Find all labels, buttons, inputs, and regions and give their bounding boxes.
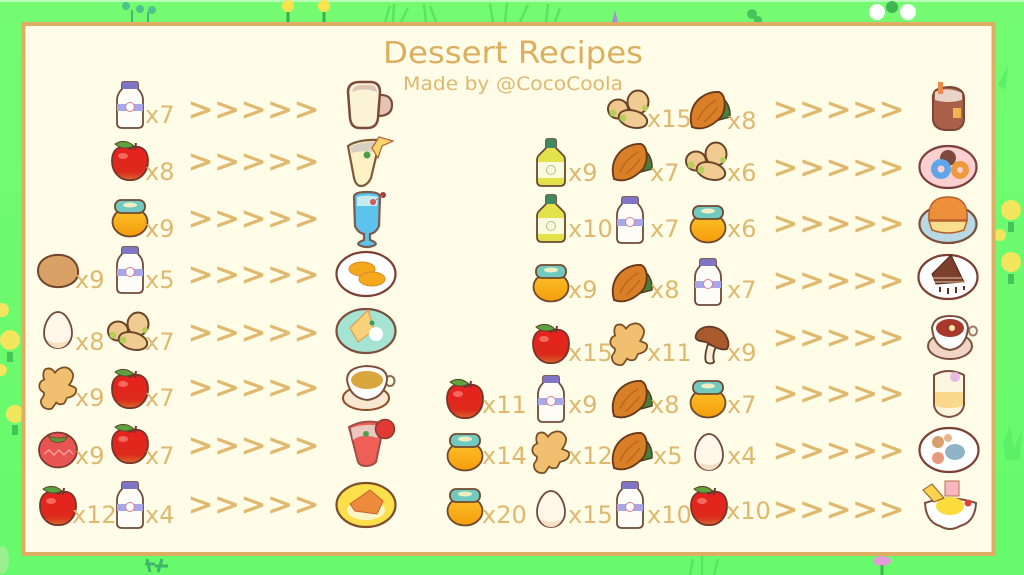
icon: tomato (39, 432, 77, 468)
result: cookie plate (920, 428, 978, 472)
result: pancakes (336, 252, 396, 296)
icon: ginger (613, 327, 644, 362)
icon: milk (617, 482, 643, 528)
icon: ginger (535, 435, 566, 470)
result: layered parfait glass (934, 371, 964, 417)
quantity: x8 (75, 328, 104, 356)
arrows: >>>>> (188, 202, 319, 236)
title: Dessert Recipes (383, 36, 643, 71)
result: apple smoothie (348, 137, 393, 186)
icon: ginger (42, 371, 73, 406)
quantity: x7 (145, 384, 174, 412)
result: pudding sundae (923, 481, 976, 529)
arrows: >>>>> (773, 376, 904, 412)
recipe row 12: honey, cocoa, milk (534, 255, 978, 305)
icon: apple (40, 486, 76, 525)
quantity: x15 (568, 501, 613, 529)
icon: honey jar (534, 265, 568, 302)
result: ginger tea cup (343, 366, 394, 410)
recipe row 15: honey, ginger, cocoa, egg (448, 428, 978, 472)
quantity: x8 (650, 391, 679, 419)
quantity: x10 (568, 215, 613, 243)
recipe row 3: honey (112, 192, 386, 247)
recipe row 8: apple and milk (40, 482, 396, 529)
result: herbal tea (928, 316, 977, 359)
icon: peanut (608, 90, 649, 131)
quantity: x9 (727, 339, 756, 367)
result: hot milk mug (348, 82, 392, 128)
icon: honey jar (448, 489, 482, 526)
recipe row 14: apple, milk, cocoa, honey (447, 371, 964, 422)
recipe row 5: egg and peanut (44, 309, 396, 356)
icon: apple (112, 141, 148, 180)
result: apple pie on yellow plate (336, 483, 396, 527)
icon: honey jar (448, 434, 482, 470)
quantity: x6 (727, 215, 756, 243)
icon: honey jar (690, 381, 726, 418)
arrows: >>>>> (773, 492, 904, 528)
result: chocolate cake slice (918, 255, 978, 299)
result: blue soda (354, 192, 386, 247)
icon: cocoa (613, 144, 652, 180)
icon: cocoa (613, 433, 652, 469)
icon: peanut (686, 142, 727, 183)
result: burger-shaped cake (920, 197, 976, 243)
quantity: x7 (145, 101, 174, 129)
icon: mushroom (696, 327, 728, 364)
quantity: x14 (482, 442, 527, 470)
arrows: >>>>> (188, 144, 319, 180)
arrows: >>>>> (188, 258, 319, 292)
result: tomato juice (349, 420, 394, 466)
icon: peanut (108, 312, 149, 353)
icon: egg (44, 312, 72, 348)
quantity: x5 (145, 266, 174, 294)
quantity: x7 (727, 276, 756, 304)
result: donuts on pink plate (920, 146, 976, 188)
arrows: >>>>> (188, 92, 319, 128)
recipe row 6: ginger and apple (42, 366, 394, 412)
icon: cocoa (613, 265, 652, 301)
icon: oil bottle (537, 195, 565, 242)
result: chiffon cake on teal plate (336, 309, 396, 353)
arrows: >>>>> (773, 320, 904, 356)
quantity: x4 (145, 501, 174, 529)
icon: apple (112, 369, 148, 408)
arrows: >>>>> (773, 92, 904, 128)
icon: milk (695, 259, 721, 305)
recipe row 13: apple, ginger, mushroom (533, 316, 977, 367)
arrows: >>>>> (773, 434, 904, 468)
quantity: x7 (650, 215, 679, 243)
recipe row 4: potato and milk (38, 247, 396, 296)
icon: egg (537, 491, 565, 527)
arrows: >>>>> (773, 264, 904, 298)
quantity: x15 (568, 339, 613, 367)
quantity: x9 (75, 266, 104, 294)
arrows: >>>>> (188, 370, 319, 406)
quantity: x12 (72, 501, 117, 529)
recipe row 16: honey, egg, milk, apple (448, 481, 976, 529)
icon: milk (117, 247, 143, 293)
icon: cocoa (691, 92, 730, 128)
quantity: x8 (650, 276, 679, 304)
icon: apple (447, 379, 483, 418)
quantity: x11 (647, 339, 692, 367)
quantity: x20 (482, 501, 527, 529)
quantity: x5 (653, 442, 682, 470)
icon: milk (117, 82, 143, 128)
arrows: >>>>> (188, 428, 319, 464)
quantity: x9 (145, 215, 174, 243)
result: iced tea jar (933, 82, 964, 130)
arrows: >>>>> (188, 488, 319, 522)
quantity: x12 (568, 442, 613, 470)
quantity: x6 (727, 159, 756, 187)
icon: milk (117, 482, 143, 528)
quantity: x9 (568, 276, 597, 304)
icon: honey jar (112, 200, 148, 236)
arrows: >>>>> (773, 206, 904, 242)
recipe row 9: peanut and cocoa (608, 82, 964, 135)
icon: cocoa (613, 381, 652, 417)
quantity: x11 (482, 391, 527, 419)
icon: oil bottle (537, 139, 565, 186)
icon: egg (695, 434, 723, 470)
icon: apple (533, 324, 569, 363)
icon: apple (691, 486, 727, 525)
icon: potato (38, 255, 78, 287)
quantity: x4 (727, 442, 756, 470)
quantity: x7 (145, 442, 174, 470)
quantity: x7 (145, 328, 174, 356)
arrows: >>>>> (188, 316, 319, 350)
icon: milk (617, 197, 643, 243)
quantity: x7 (650, 159, 679, 187)
quantity: x9 (568, 159, 597, 187)
icon: honey jar (690, 206, 726, 242)
quantity: x8 (145, 158, 174, 186)
recipe row 1: milk (117, 82, 392, 129)
quantity: x9 (568, 391, 597, 419)
recipe row 7: tomato and apple (39, 420, 394, 470)
quantity: x9 (75, 384, 104, 412)
quantity: x15 (647, 105, 692, 133)
icon: apple (112, 424, 148, 463)
recipe row 2: apple (112, 137, 393, 186)
subtitle: Made by @CocoCoola (403, 73, 623, 95)
quantity: x7 (727, 391, 756, 419)
quantity: x8 (727, 107, 756, 135)
arrows: >>>>> (773, 150, 904, 186)
recipe row 11: oil, milk, honey (537, 195, 976, 243)
quantity: x10 (726, 497, 771, 525)
quantity: x10 (647, 501, 692, 529)
recipe row 10: oil, cocoa, peanut (537, 139, 976, 188)
quantity: x9 (75, 442, 104, 470)
icon: milk (538, 376, 564, 422)
